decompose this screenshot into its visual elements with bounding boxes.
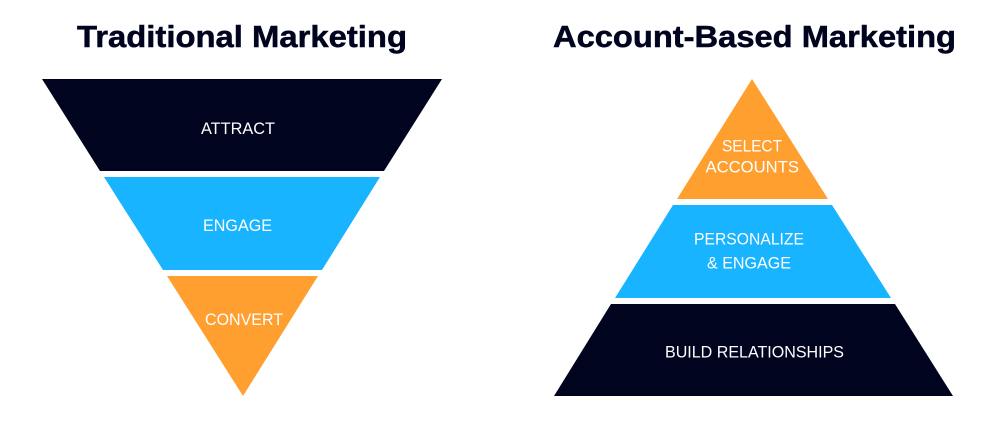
heading: account-based marketing: Account-Based Marketing <box>553 19 956 54</box>
panel: traditional marketing funnel <box>42 19 442 396</box>
pyramid tier: select accounts: SELECT <box>722 136 782 156</box>
pyramid tier: personalize and engage: PERSONALIZE <box>694 230 804 248</box>
funnel tier: attract: ATTRACT <box>201 119 275 138</box>
funnel tier: engage: ENGAGE <box>203 216 272 235</box>
pyramid tier: select accounts: ACCOUNTS <box>706 158 799 176</box>
funnel tier: convert <box>167 276 318 396</box>
funnel tier: attract <box>42 79 442 171</box>
panel: account-based marketing pyramid <box>553 19 956 396</box>
pyramid tier: select accounts <box>677 79 828 199</box>
pyramid tier: personalize and engage <box>615 205 891 298</box>
pyramid tier: build relationships <box>554 304 953 396</box>
pyramid tier: build relationships: BUILD RELATIONSHIPS <box>665 342 844 362</box>
funnel tier: engage <box>104 177 380 270</box>
pyramid tier: personalize and engage: & ENGAGE <box>707 254 791 272</box>
funnel tier: convert: CONVERT <box>205 310 283 329</box>
heading: traditional marketing: Traditional Marketing <box>77 19 407 54</box>
